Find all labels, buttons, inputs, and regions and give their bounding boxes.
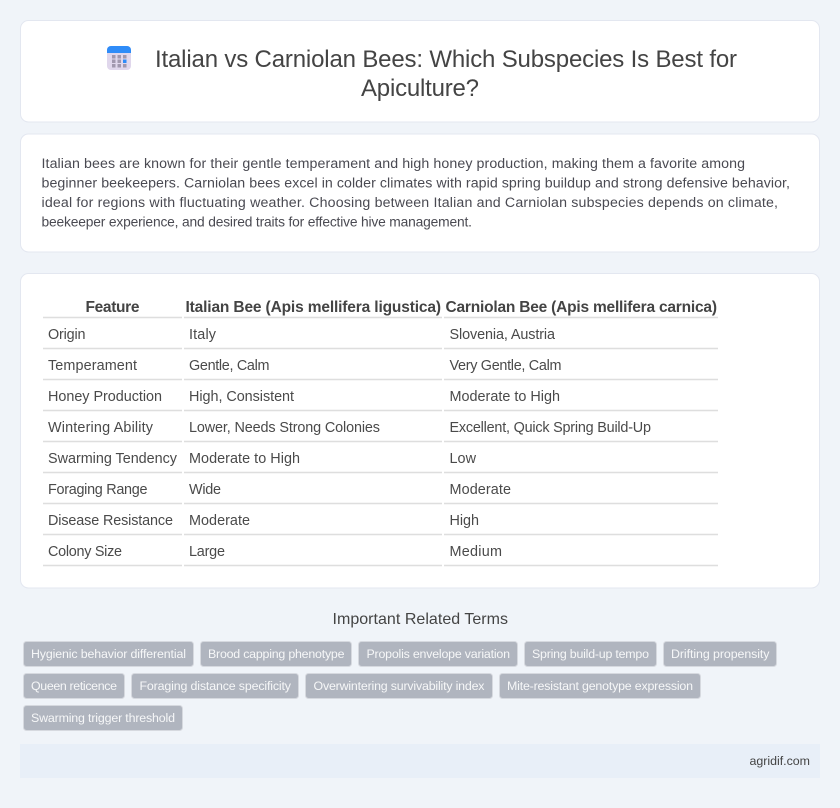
row: swarming tendency: Moderate to High <box>189 451 300 467</box>
title: Apiculture? <box>361 75 479 102</box>
row: origin <box>48 327 555 343</box>
tag <box>24 706 182 730</box>
text block: intro: beginner beekeepers. Carniolan bees excel in colder climates with rapid spring buildup and strong defensive behavior, <box>42 176 790 192</box>
row: origin: Origin <box>48 327 86 343</box>
tag: Overwintering survivability index <box>314 679 485 693</box>
row: temperament: Very Gentle, Calm <box>450 358 562 374</box>
text block: intro: Italian bees are known for their gentle temperament and high honey production, making them a favorite among <box>42 156 745 172</box>
text block: intro <box>42 156 790 230</box>
icon: calendar <box>107 46 131 70</box>
row: colony size: Colony Size <box>48 544 122 560</box>
tag: Propolis envelope variation <box>366 647 510 661</box>
row: wintering ability: Lower, Needs Strong Colonies <box>189 420 380 436</box>
row: swarming tendency: Low <box>450 451 477 467</box>
heading: related terms: Important Related Terms <box>332 611 508 628</box>
panel: header <box>20 20 820 122</box>
tag <box>24 642 194 666</box>
tag: Brood capping phenotype <box>208 647 345 661</box>
row: honey production <box>48 389 560 405</box>
row: foraging range <box>48 482 511 498</box>
footer <box>20 744 820 778</box>
row: honey production: Moderate to High <box>450 389 560 405</box>
row: foraging range: Moderate <box>450 482 511 498</box>
title: Italian vs Carniolan Bees: Which Subspecies Is Best for <box>155 46 737 73</box>
row: colony size: Large <box>189 544 225 560</box>
row: foraging range: Foraging Range <box>48 482 148 498</box>
row: origin: Slovenia, Austria <box>450 327 555 343</box>
tag <box>132 674 298 698</box>
panel: intro paragraph <box>20 134 820 252</box>
row: wintering ability: Wintering Ability <box>48 420 154 436</box>
related term tags <box>24 642 776 730</box>
tag <box>306 674 492 698</box>
text block: intro: beekeeper experience, and desired traits for effective hive management. <box>42 214 472 230</box>
table header: Feature <box>86 299 140 316</box>
tag <box>664 642 776 666</box>
tag: Swarming trigger threshold <box>31 711 175 725</box>
tag: Mite-resistant genotype expression <box>507 679 693 693</box>
row: temperament <box>48 358 562 374</box>
text block: intro: ideal for regions with fluctuating weather. Choosing between Italian and Carniolan subspecies depends on climate, <box>42 195 778 211</box>
table grid lines <box>43 318 718 566</box>
row: swarming tendency: Swarming Tendency <box>48 451 178 467</box>
tag: Drifting propensity <box>671 647 770 661</box>
footer: agridif.com <box>750 754 810 768</box>
table header <box>86 299 717 316</box>
row: disease resistance: High <box>450 513 479 529</box>
row: disease resistance: Disease Resistance <box>48 513 173 529</box>
row: colony size <box>48 544 502 560</box>
row: colony size: Medium <box>450 544 502 560</box>
row: origin: Italy <box>189 327 217 343</box>
tag: Queen reticence <box>31 679 117 693</box>
row: disease resistance <box>48 513 479 529</box>
row: honey production: Honey Production <box>48 389 162 405</box>
tag: Hygienic behavior differential <box>31 647 186 661</box>
tag <box>524 642 656 666</box>
table header: Carniolan Bee (Apis mellifera carnica) <box>446 299 717 316</box>
row: disease resistance: Moderate <box>189 513 250 529</box>
tag <box>24 674 124 698</box>
tag: Foraging distance specificity <box>140 679 292 693</box>
row: honey production: High, Consistent <box>189 389 294 405</box>
row: wintering ability: Excellent, Quick Spring Build-Up <box>450 420 651 436</box>
panel: comparison table <box>20 274 820 588</box>
row: foraging range: Wide <box>189 482 221 498</box>
row: temperament: Temperament <box>48 358 137 374</box>
tag: Spring build-up tempo <box>532 647 649 661</box>
row: temperament: Gentle, Calm <box>189 358 270 374</box>
tag <box>358 642 518 666</box>
row: swarming tendency <box>48 451 477 467</box>
table header: Italian Bee (Apis mellifera ligustica) <box>186 299 441 316</box>
tag <box>500 674 700 698</box>
title <box>155 46 737 102</box>
tag <box>200 642 352 666</box>
row: wintering ability <box>48 420 651 436</box>
